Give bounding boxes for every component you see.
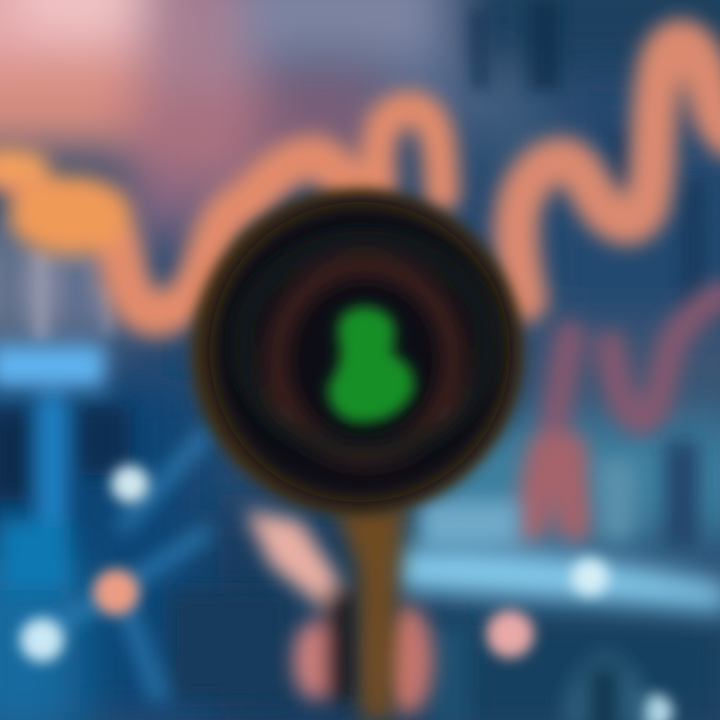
magnifying glass rim	[191, 189, 523, 515]
magnifying glass lens	[210, 202, 510, 502]
lens: green symbol	[328, 306, 414, 423]
lower right light band	[395, 548, 720, 612]
chart line: upper orange trend	[0, 42, 720, 315]
lower right structures	[430, 625, 645, 720]
chart line: lower muted trend	[530, 295, 720, 525]
hand holding magnifier	[245, 510, 434, 715]
lower chart: dark bars	[420, 440, 699, 550]
background: building columns	[0, 0, 706, 340]
lens: dim concentric rings	[243, 240, 487, 455]
lower left network	[0, 332, 226, 707]
magnifier handle	[335, 505, 405, 720]
network nodes	[20, 465, 673, 720]
